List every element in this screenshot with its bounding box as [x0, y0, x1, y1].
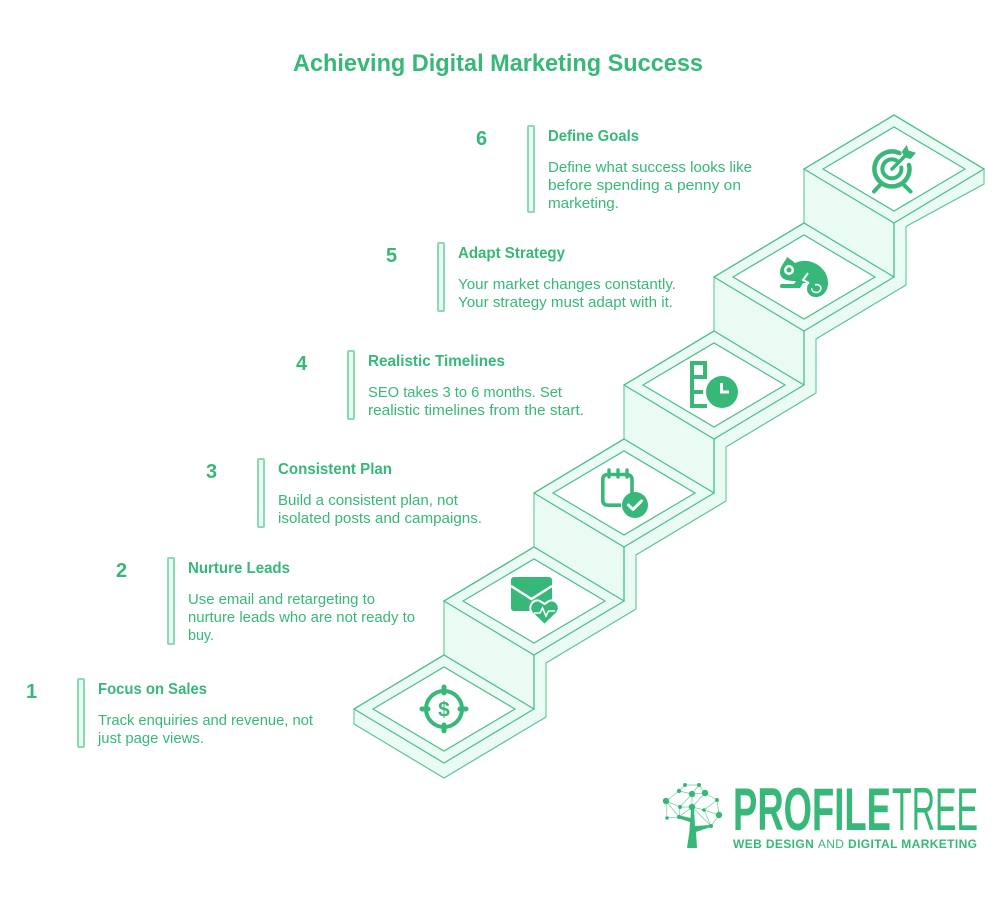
number 4: 4	[296, 353, 308, 375]
heading: Focus on Sales: Focus on Sales	[98, 681, 207, 698]
number 6: 6	[476, 128, 487, 150]
description 2: nurture leads who are not ready to	[188, 610, 415, 626]
description 4	[368, 385, 584, 419]
step 5 platform	[714, 223, 894, 331]
description 4: SEO takes 3 to 6 months. Set	[368, 385, 562, 401]
icon: email with heart	[511, 577, 559, 625]
number 1: 1	[26, 681, 37, 703]
description 4: realistic timelines from the start.	[368, 403, 584, 419]
description 3: isolated posts and campaigns.	[278, 511, 482, 527]
description 6: Define what success looks like	[548, 160, 752, 176]
description 2	[188, 592, 415, 644]
icon: timeline and clock	[690, 361, 738, 408]
step 6 platform	[804, 115, 984, 223]
number 3: 3	[206, 461, 217, 483]
description 5: Your market changes constantly.	[458, 277, 676, 293]
icon: calendar with check	[603, 470, 648, 518]
accent bar 4	[348, 351, 354, 419]
step 1 platform	[354, 655, 534, 763]
step 3 label	[206, 459, 482, 527]
icon: dollar target: $	[438, 698, 450, 722]
accent bar 6	[528, 126, 534, 212]
step 1 label	[26, 679, 313, 747]
description 6: marketing.	[548, 196, 619, 212]
accent bar 5	[438, 243, 444, 311]
description 3: Build a consistent plan, not	[278, 493, 458, 509]
accent bar 3	[258, 459, 264, 527]
description 1: just page views.	[97, 731, 204, 747]
description 6: before spending a penny on	[548, 178, 741, 194]
number 5: 5	[386, 245, 397, 267]
heading: Adapt Strategy: Adapt Strategy	[458, 245, 565, 262]
description 6	[548, 160, 752, 212]
accent bar 1	[78, 679, 84, 747]
description 1	[97, 713, 313, 747]
heading: Define Goals: Define Goals	[548, 128, 639, 145]
heading: Nurture Leads: Nurture Leads	[188, 560, 290, 577]
icon: network tree	[663, 783, 722, 848]
logo: ProfileTree	[663, 776, 978, 851]
step 4 platform	[624, 331, 804, 439]
staircase diagram	[354, 115, 984, 778]
description 5: Your strategy must adapt with it.	[458, 295, 673, 311]
icon: target with arrow	[874, 145, 916, 192]
description 5	[458, 277, 676, 311]
step 2 platform	[444, 547, 624, 655]
step 3 platform	[534, 439, 714, 547]
riser edges	[354, 169, 984, 724]
description 2: buy.	[188, 628, 214, 644]
step 4 label	[296, 351, 584, 419]
description 2: Use email and retargeting to	[188, 592, 375, 608]
icon: dollar target	[422, 687, 466, 731]
heading: Consistent Plan: Consistent Plan	[278, 461, 392, 478]
step 5 label	[386, 243, 676, 311]
step 6 label	[476, 126, 752, 212]
icon: chameleon	[780, 257, 828, 297]
description 3	[278, 493, 482, 527]
title: Achieving Digital Marketing Success	[293, 50, 703, 77]
number 2: 2	[116, 560, 127, 582]
accent bar 2	[168, 558, 174, 644]
description 1: Track enquiries and revenue, not	[98, 713, 313, 729]
wordmark: PROFILE	[733, 776, 891, 843]
step 2 label	[116, 558, 415, 644]
staircase silhouette	[354, 115, 984, 778]
heading: Realistic Timelines: Realistic Timelines	[368, 353, 505, 370]
tagline: WEB DESIGN AND DIGITAL MARKETING	[733, 837, 977, 851]
